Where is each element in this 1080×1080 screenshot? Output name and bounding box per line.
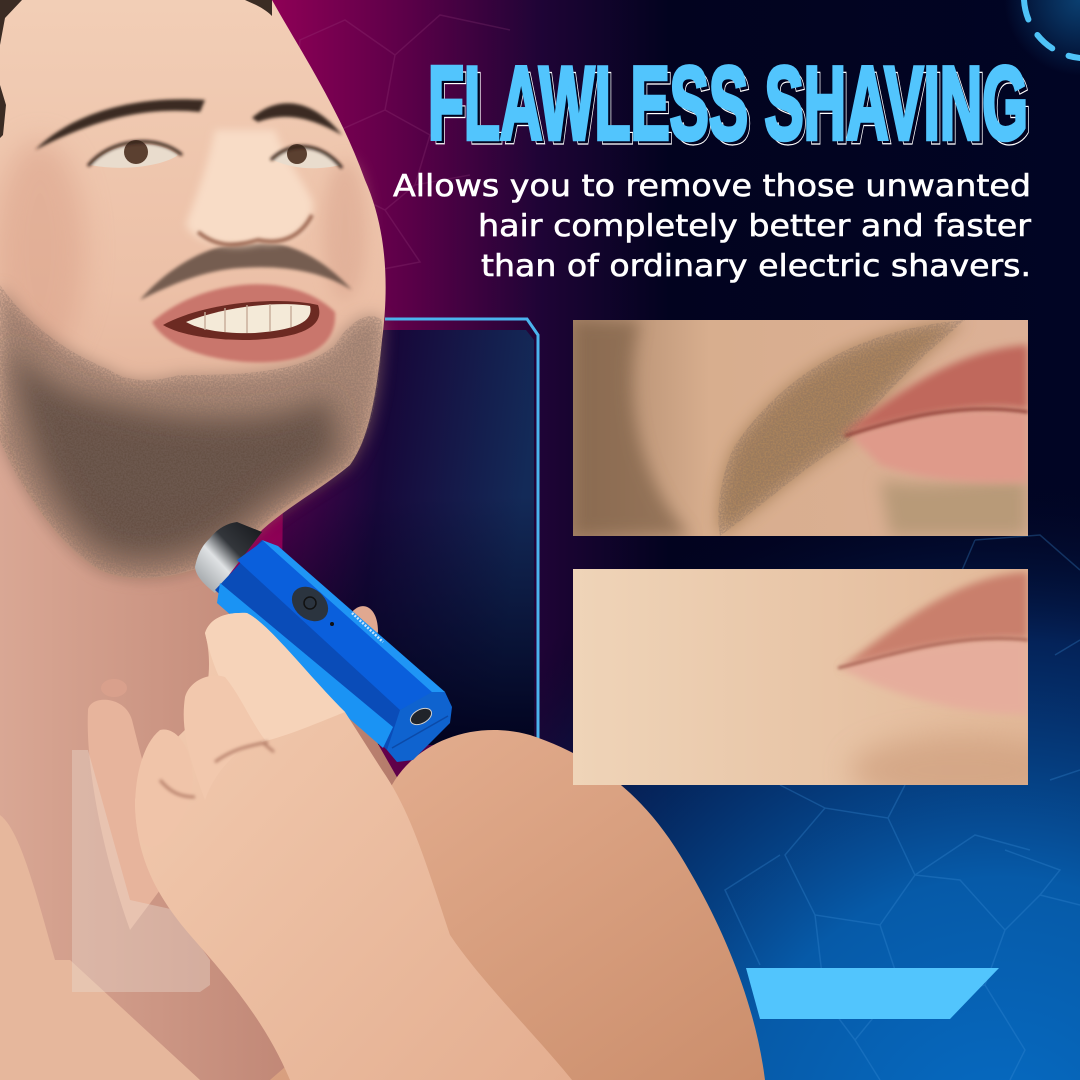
eyebrows <box>35 99 205 150</box>
dark beard core <box>10 340 340 558</box>
head <box>195 522 262 593</box>
base fill <box>215 540 445 750</box>
photo: after shaving <box>573 569 1028 785</box>
upper strip <box>262 540 445 694</box>
hexagon pattern upper <box>295 15 510 270</box>
electric shaver <box>195 522 452 762</box>
moustache <box>140 243 352 300</box>
description text: hair completely better and faster <box>478 209 1032 244</box>
mouth <box>152 284 335 362</box>
translucent rectangle overlay <box>72 750 210 992</box>
lower strip <box>217 583 393 748</box>
head skin <box>0 0 386 578</box>
neck and chest <box>0 430 570 1080</box>
description text: Allows you to remove those unwanted <box>393 169 1031 204</box>
dashed circle corner ornament <box>1024 0 1080 58</box>
end cap <box>387 692 452 762</box>
shoulder and torso <box>270 730 765 1080</box>
holding hand <box>135 613 572 1080</box>
eyes <box>90 144 178 168</box>
engraved label <box>352 613 383 642</box>
glowing frame panel <box>280 319 538 745</box>
hexagon pattern lower <box>725 535 1080 1080</box>
power button <box>285 580 335 628</box>
light stubble <box>0 285 382 578</box>
nose <box>186 130 313 246</box>
back finger behind shaver <box>352 606 378 660</box>
description text: than of ordinary electric shavers. <box>481 249 1031 284</box>
photo: before shaving <box>573 320 1028 536</box>
man <box>0 0 765 1080</box>
hair <box>0 0 272 138</box>
raised left hand fingers <box>0 679 200 1080</box>
mid strip <box>237 541 433 710</box>
accent parallelogram <box>746 968 999 1019</box>
description text <box>393 169 1032 284</box>
cheek shading <box>0 140 85 360</box>
